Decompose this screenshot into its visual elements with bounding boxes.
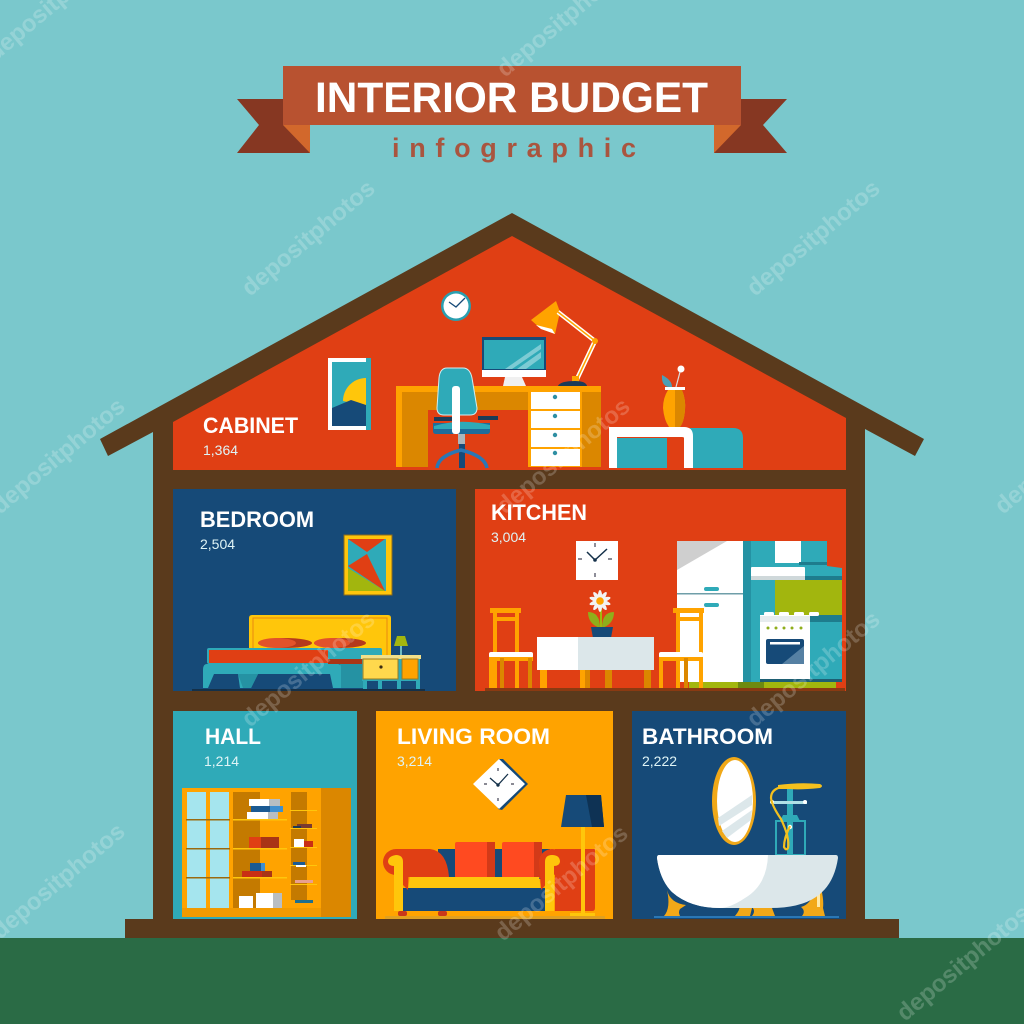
ground: [0, 938, 1024, 1024]
nightstand with lamp: [361, 636, 421, 689]
potted flower: [588, 590, 614, 638]
subtitle: infographic: [392, 133, 636, 163]
panel: cabinet room: [173, 236, 846, 470]
desk: [396, 386, 601, 468]
dining table: [537, 637, 654, 688]
panel: bathroom: [632, 711, 846, 919]
value: kitchen: 3,004: [491, 529, 526, 545]
value: bathroom: 2,222: [642, 753, 677, 769]
watermarks: depositphotos: [237, 175, 381, 302]
floor lamp and side panel: [555, 795, 604, 916]
title text: INTERIOR BUDGET: [315, 74, 708, 122]
kitchen cabinets and stove: [689, 541, 842, 688]
watermarks: depositphotos: [237, 606, 381, 733]
panel: kitchen: [475, 489, 846, 691]
label: cabinet: CABINET: [203, 413, 299, 438]
faucet: [770, 783, 822, 855]
watermarks: depositphotos: [492, 393, 636, 520]
label: bathroom: BATHROOM: [642, 724, 773, 749]
kitchen wall clock: [576, 541, 618, 580]
panel: bedroom: [173, 489, 456, 691]
label: bedroom: BEDROOM: [200, 507, 314, 532]
diamond wall clock: [473, 759, 528, 810]
value: living room: 3,214: [397, 753, 432, 769]
panel: hall: [173, 711, 357, 919]
left chair: [489, 608, 533, 688]
wall picture: [328, 358, 371, 430]
side table and bench: [609, 427, 743, 468]
panel: living room: [376, 711, 613, 919]
value: hall: 1,214: [204, 753, 239, 769]
bedroom picture: [344, 535, 392, 595]
value: cabinet: 1,364: [203, 442, 238, 458]
value: bedroom: 2,504: [200, 536, 235, 552]
fridge: [677, 541, 749, 682]
bed: [203, 615, 391, 688]
watermarks: depositphotos: [490, 820, 634, 947]
wardrobe: [182, 788, 351, 917]
desk lamp: [531, 301, 598, 386]
watermarks: depositphotos: [742, 175, 886, 302]
watermarks: depositphotos: [742, 606, 886, 733]
sofa: [383, 842, 565, 916]
books and boxes: [239, 799, 313, 908]
label: living room: LIVING ROOM: [397, 724, 550, 749]
right chair: [659, 608, 704, 688]
bathtub: [654, 855, 839, 918]
label: kitchen: KITCHEN: [491, 500, 587, 525]
title banner: [237, 66, 787, 153]
label: hall: HALL: [205, 724, 261, 749]
vase with flower: [662, 366, 685, 427]
oval mirror: [712, 757, 756, 845]
computer monitor: [482, 337, 546, 386]
office chair: [433, 368, 498, 468]
icon: wall clock: [441, 291, 471, 321]
house structure: [100, 213, 924, 938]
